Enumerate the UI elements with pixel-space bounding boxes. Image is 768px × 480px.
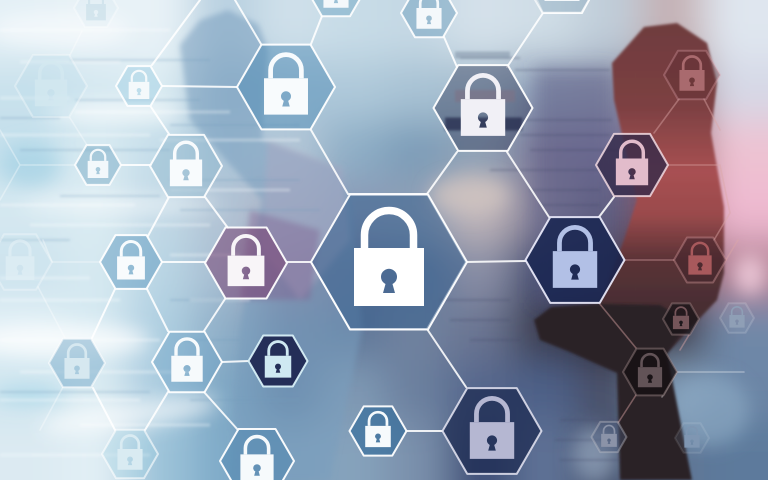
faint hexagon padlock lower right bbox=[675, 423, 709, 453]
hexagon padlock dark torso bbox=[623, 349, 677, 395]
faint hexagon padlock far left bbox=[15, 55, 87, 117]
hexagon padlock purple bbox=[205, 227, 287, 299]
hexagon padlock dark figure small bbox=[663, 303, 699, 335]
central hexagon with large padlock bbox=[311, 194, 467, 330]
faint hexagon padlock top left bbox=[74, 0, 118, 27]
left silhouette: blurred head and shoulders bbox=[180, 10, 362, 480]
hexagon padlock bottom right of centre bbox=[442, 388, 542, 474]
right silhouette: dark arm and torso bbox=[534, 304, 692, 480]
hexagon padlock left row two small bbox=[75, 145, 121, 185]
hexagon padlock red figure head lower bbox=[596, 134, 668, 196]
hexagon padlock lower middle left bbox=[152, 332, 222, 392]
hexagon padlock dark navy bbox=[248, 335, 308, 387]
network connector lines bbox=[92, 0, 614, 431]
hexagon padlock red figure torso bbox=[674, 237, 726, 283]
hexagon padlock dark navy right of centre bbox=[526, 217, 624, 303]
hexagon padlock lower torso small bbox=[592, 422, 626, 452]
faint hexagon padlock far left middle bbox=[0, 234, 52, 290]
hexagon padlock left row three bbox=[100, 235, 162, 289]
hexagon padlock red figure head upper bbox=[664, 51, 720, 99]
hexagon padlock bottom left faint bbox=[102, 430, 158, 478]
hexagon padlock top centre bbox=[401, 0, 457, 37]
right silhouette: person lit in red bbox=[600, 23, 724, 353]
hexagon padlock bottom centre bbox=[350, 406, 406, 456]
hexagon padlock bottom middle bbox=[220, 429, 294, 480]
hexagon padlock left row two bbox=[150, 135, 222, 197]
hexagon padlock upper left of centre bbox=[237, 45, 335, 129]
faint connector lines across the red figure bbox=[599, 99, 738, 423]
faint hexagon padlock right edge bbox=[720, 303, 754, 333]
motion streaks across the photo bbox=[0, 30, 620, 460]
hexagon padlock left row one bbox=[116, 66, 162, 106]
hexagon padlock lower left bbox=[49, 339, 105, 387]
hexagon padlock top right edge bbox=[523, 0, 601, 13]
hexagon padlock top edge bbox=[308, 0, 364, 16]
hexagon padlock upper right of centre bbox=[434, 65, 532, 151]
